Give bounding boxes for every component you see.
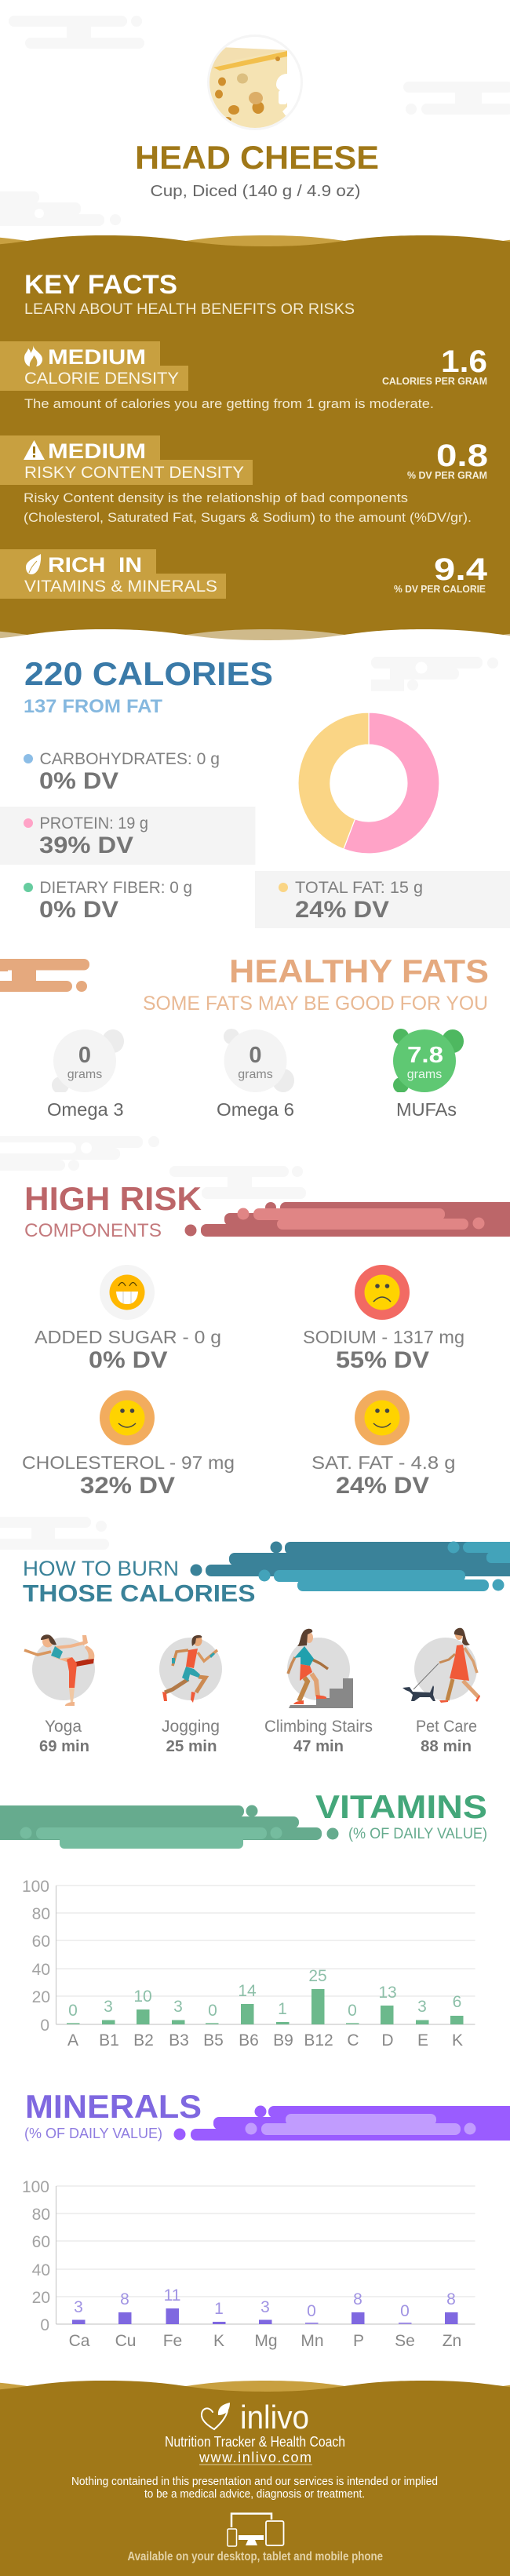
bar chart: vitamins: 1: [278, 2000, 287, 2018]
bar chart: vitamins: B3: [169, 2031, 189, 2050]
bar chart: vitamins: B1: [99, 2031, 119, 2050]
background cloud: lower left: [0, 1136, 159, 1171]
legend: dietary fiber: DIETARY FIBER: 0 g: [39, 879, 192, 897]
key facts heading: LEARN ABOUT HEALTH BENEFITS OR RISKS: [24, 301, 355, 318]
bar chart: vitamins: 3: [173, 1998, 183, 2016]
bar chart: vitamins: 100: [22, 1878, 49, 1896]
bar chart: vitamins: 13: [378, 1984, 397, 2002]
high risk subheading: COMPONENTS: [24, 1220, 162, 1241]
icon: stairs climber figure: [288, 1629, 353, 1708]
stat: omega 6: 0: [249, 1043, 262, 1068]
fact: risky content density: RISKY CONTENT DENSITY: [24, 464, 244, 482]
icon: jogger figure: [162, 1635, 217, 1703]
fact: calorie density: The amount of calories you are getting from 1 gram is moderate.: [24, 397, 434, 411]
legend: carbohydrates: [24, 750, 220, 794]
bar chart: minerals: 0: [400, 2302, 410, 2320]
legend: protein: PROTEIN: 19 g: [39, 814, 148, 833]
bar chart: vitamins: 20: [32, 1988, 50, 2006]
bar chart: minerals: Fe: [163, 2332, 182, 2350]
item: cholesterol: CHOLESTEROL - 97 mg: [22, 1452, 235, 1473]
decorative cloud: high risk: [185, 1202, 510, 1237]
background cloud: right: [403, 82, 510, 115]
bar chart: minerals: Mg: [254, 2332, 278, 2350]
fact: risky content density: 0.8: [436, 439, 488, 473]
bar chart: vitamins: 40: [32, 1961, 50, 1979]
icon: warning triangle: [24, 440, 45, 460]
bar chart: vitamins: 0: [208, 2002, 217, 2020]
bar chart: vitamins: B2: [133, 2031, 154, 2050]
logo: inlivo: [202, 2399, 309, 2436]
calories from fat: 137 FROM FAT: [24, 696, 162, 717]
fact: calorie density: CALORIE DENSITY: [24, 370, 179, 388]
minerals heading: MINERALS: [25, 2088, 202, 2125]
bar chart: vitamins: C: [347, 2031, 359, 2050]
item: sodium: SODIUM - 1317 mg: [303, 1327, 464, 1347]
item: sodium: 55% DV: [336, 1347, 429, 1373]
item: sodium: [303, 1265, 464, 1373]
decorative cloud: burn: [190, 1541, 510, 1591]
bar chart: minerals: Cu: [115, 2332, 136, 2350]
background cloud: left: [0, 191, 121, 226]
bar chart: minerals: 8: [353, 2290, 362, 2308]
fact: calorie density: 1.6: [441, 344, 487, 379]
key facts heading: [24, 270, 355, 318]
item: saturated fat: 24% DV: [336, 1473, 429, 1499]
legend: protein: [24, 814, 148, 858]
bar chart: minerals: P: [353, 2332, 364, 2350]
bar chart: minerals: 60: [32, 2233, 50, 2251]
panel: vitamins: (% OF DAILY VALUE): [348, 1826, 487, 1842]
bar chart: minerals: 8: [446, 2290, 456, 2308]
bar chart: vitamins: 14: [238, 1982, 257, 2000]
decorative cloud: minerals: [174, 2106, 510, 2141]
fact: rich in vitamins and minerals: [0, 549, 488, 599]
calories heading: 220 CALORIES: [24, 655, 273, 692]
title: [135, 139, 379, 200]
healthy fats subheading: SOME FATS MAY BE GOOD FOR YOU: [143, 993, 488, 1015]
bar chart: vitamins: B9: [273, 2031, 293, 2050]
serving size: Cup, Diced (140 g / 4.9 oz): [151, 183, 361, 200]
stat: omega 6: grams: [238, 1068, 273, 1081]
fact: risky content density: MEDIUM: [48, 439, 146, 463]
background cloud: high risk: [169, 1166, 306, 1199]
stat: MUFAs: 7.8: [407, 1043, 443, 1068]
panel: minerals: [22, 2088, 510, 2350]
fact: calorie density: MEDIUM: [48, 345, 146, 369]
disclaimer: [71, 2476, 438, 2501]
bar chart: minerals: 8: [120, 2290, 129, 2308]
stat: MUFAs: grams: [407, 1068, 442, 1081]
bar chart: vitamins: 10: [133, 1988, 152, 2006]
legend: total fat: TOTAL FAT: 15 g: [295, 879, 423, 897]
icon: sad face: [364, 1274, 400, 1310]
fact: risky content density: (Cholesterol, Saturated Fat, Sugars & Sodium) to the amount (%DV/gr).: [24, 511, 472, 525]
background cloud: top left: [9, 16, 144, 49]
icon: devices: [228, 2514, 284, 2546]
bar chart: minerals: 1: [214, 2300, 224, 2318]
activity: pet care: Pet Care: [416, 1718, 477, 1736]
fact: calorie density: CALORIES PER GRAM: [382, 375, 487, 387]
bar chart: vitamins: 3: [417, 1998, 427, 2016]
stat: omega 3: 0: [78, 1043, 91, 1068]
stat: omega 3: Omega 3: [47, 1099, 124, 1120]
legend: carbohydrates: 0% DV: [39, 768, 118, 794]
fact: risky content density: Risky Content density is the relationship of bad components: [24, 491, 408, 505]
bar chart: vitamins: A: [67, 2031, 78, 2050]
healthy fats heading: HEALTHY FATS: [229, 953, 489, 989]
fact: rich in vitamins and minerals: % DV PER CALORIE: [394, 583, 486, 595]
bar chart: minerals: 3: [260, 2298, 270, 2316]
bar chart: vitamins: 80: [32, 1905, 50, 1923]
fact: rich in vitamins and minerals: VITAMINS & MINERALS: [24, 578, 217, 596]
title: HEAD CHEESE: [135, 139, 379, 176]
activity: yoga: 69 min: [39, 1738, 89, 1755]
bar chart: minerals: Se: [395, 2332, 415, 2350]
bar chart: minerals: 11: [164, 2286, 180, 2305]
bar chart: minerals: 3: [74, 2298, 83, 2316]
icon: dog walker figure: [403, 1628, 480, 1703]
item: saturated fat: SAT. FAT - 4.8 g: [311, 1452, 455, 1473]
panel: how to burn calories: THOSE CALORIES: [23, 1579, 256, 1607]
bar chart: minerals: 0: [307, 2302, 316, 2320]
panel: calories: [0, 655, 510, 928]
bar chart: minerals: Mn: [301, 2332, 324, 2350]
panel: high risk: [22, 1180, 510, 1499]
activity: pet care: 88 min: [421, 1738, 472, 1755]
item: added sugar: 0% DV: [89, 1347, 168, 1373]
fact: calorie density: [0, 341, 487, 411]
activity: yoga: [24, 1634, 95, 1755]
bar chart: minerals: Zn: [443, 2332, 461, 2350]
tagline: Nutrition Tracker & Health Coach: [165, 2434, 345, 2450]
bar chart: vitamins: 6: [453, 1993, 461, 2011]
bar chart: vitamins: B6: [239, 2031, 259, 2050]
icon: grinning face: [110, 1274, 144, 1310]
bar chart: minerals: K: [213, 2332, 224, 2350]
bar chart: vitamins: [22, 1878, 475, 2050]
bar chart: vitamins: 3: [104, 1998, 113, 2016]
website: www.inlivo.com: [199, 2450, 311, 2465]
logo: inlivo: inlivo: [240, 2399, 309, 2436]
legend: total fat: [279, 879, 423, 923]
bar chart: vitamins: 0: [348, 2002, 357, 2020]
activity: climbing stairs: [264, 1629, 373, 1755]
panel: minerals: (% OF DAILY VALUE): [24, 2126, 162, 2141]
activity: jogging: Jogging: [162, 1718, 220, 1736]
decorative cloud: healthy fats: [0, 959, 89, 992]
panel: vitamins: [0, 1788, 487, 2050]
bar chart: vitamins: B12: [304, 2031, 333, 2050]
vitamins heading: VITAMINS: [315, 1788, 487, 1825]
stat: MUFAs: MUFAs: [396, 1099, 457, 1120]
bar chart: vitamins: 60: [32, 1933, 50, 1951]
stat: omega 6: Omega 6: [217, 1099, 294, 1120]
item: added sugar: ADDED SUGAR - 0 g: [35, 1327, 221, 1347]
gray row backgrounds: [0, 807, 510, 928]
key facts heading: KEY FACTS: [24, 270, 177, 300]
activity: climbing stairs: Climbing Stairs: [264, 1718, 373, 1736]
legend: protein: 39% DV: [39, 833, 133, 858]
legend: dietary fiber: [24, 879, 192, 923]
bar chart: vitamins: 25: [308, 1967, 327, 1985]
bar chart: vitamins: D: [381, 2031, 394, 2050]
icon: flame: [24, 345, 42, 366]
bar chart: minerals: 80: [32, 2206, 50, 2224]
activity: pet care: [403, 1628, 480, 1755]
activity: climbing stairs: 47 min: [293, 1738, 344, 1755]
stat: omega 6: [217, 1029, 294, 1120]
background cloud: burn: [0, 1517, 109, 1550]
item: saturated fat: [311, 1390, 455, 1499]
food image: cheese in circle: [207, 35, 303, 130]
bar chart: minerals: [22, 2178, 475, 2350]
activity: yoga: Yoga: [45, 1718, 82, 1736]
bar chart: minerals: 20: [32, 2289, 50, 2307]
bar chart: vitamins: B5: [203, 2031, 224, 2050]
panel: footer: [0, 2381, 510, 2576]
decorative cloud: vitamins: [0, 1805, 339, 1849]
item: added sugar: [35, 1265, 221, 1373]
disclaimer: to be a medical advice, diagnosis or treatment.: [144, 2488, 365, 2501]
icon: yoga figure: [24, 1634, 94, 1706]
stat: MUFAs: [393, 1029, 464, 1120]
fact: risky content density: % DV PER GRAM: [407, 469, 487, 481]
bar chart: minerals: 0: [40, 2316, 49, 2334]
fact: rich in vitamins and minerals: RICH IN: [48, 553, 142, 577]
activity: jogging: [159, 1635, 222, 1755]
burn heading: HOW TO BURN: [23, 1557, 179, 1580]
bar chart: minerals: Ca: [69, 2332, 90, 2350]
icon: leaf: [26, 554, 41, 574]
legend: carbohydrates: CARBOHYDRATES: 0 g: [39, 750, 220, 768]
bar chart: minerals: 100: [22, 2178, 49, 2196]
panel: key facts: [0, 235, 510, 659]
availability note: Available on your desktop, tablet and mobile phone: [127, 2550, 383, 2563]
bar chart: minerals: 40: [32, 2261, 50, 2279]
fact: risky content density: [0, 435, 488, 525]
background cloud: calories: [365, 657, 498, 691]
bar chart: vitamins: K: [452, 2031, 463, 2050]
legend: dietary fiber: 0% DV: [39, 897, 118, 923]
icon: smiling face: [364, 1400, 400, 1436]
donut chart: [298, 712, 439, 854]
high risk heading: HIGH RISK: [24, 1180, 202, 1217]
disclaimer: Nothing contained in this presentation and our services is intended or implied: [71, 2476, 438, 2488]
stat: omega 3: [47, 1029, 124, 1120]
activity: jogging: 25 min: [166, 1738, 217, 1755]
item: cholesterol: 32% DV: [80, 1473, 175, 1499]
stat: omega 3: grams: [67, 1068, 102, 1081]
bar chart: vitamins: 0: [40, 2017, 49, 2035]
item: cholesterol: [22, 1390, 235, 1499]
icon: smiling face: [110, 1400, 144, 1436]
bar chart: vitamins: 0: [68, 2002, 78, 2020]
legend: total fat: 24% DV: [295, 897, 389, 923]
fact: rich in vitamins and minerals: 9.4: [434, 552, 488, 587]
panel: how to burn calories: [23, 1541, 510, 1755]
panel: healthy fats: [0, 953, 489, 1120]
bar chart: vitamins: E: [417, 2031, 428, 2050]
